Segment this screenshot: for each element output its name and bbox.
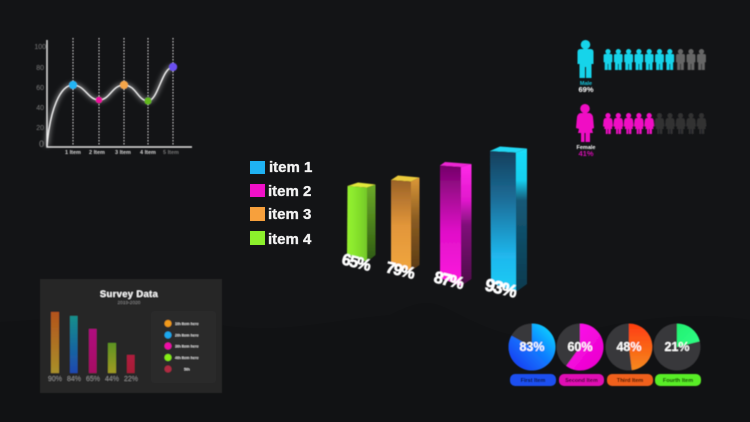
pie: first item 83%: [508, 324, 556, 370]
y axis labels: 40: [36, 105, 44, 112]
survey bar values: 65%: [86, 376, 100, 383]
pie: second item 60%: 60%: [567, 340, 593, 354]
female percent: 41%: [578, 149, 594, 158]
heading: Survey Data: [100, 289, 159, 300]
curve: [47, 67, 173, 146]
dark hills silhouette: [0, 303, 750, 422]
people chart: male: [578, 40, 706, 94]
y axis labels: 20: [36, 125, 44, 132]
icon row: female: [603, 113, 706, 134]
bar: orange 79%: [384, 176, 420, 283]
inner legend panel: 1th Item here: [175, 322, 199, 326]
pill: second item: [559, 374, 604, 386]
bar: magenta 87%: 87%: [432, 268, 466, 293]
bar: cyan 93%: 93%: [483, 274, 520, 302]
inner legend panel: 5th: [184, 368, 190, 372]
pill: fourth item: Fourth Item: [663, 378, 693, 384]
x axis labels: 2 Item: [89, 150, 105, 156]
curve glow: [47, 67, 173, 146]
pie: third item 48%: [606, 324, 652, 370]
male label: Male: [580, 81, 592, 87]
y axis labels: [34, 44, 46, 149]
pie: fourth item 21%: [654, 324, 700, 370]
pill: third item: Third Item: [617, 378, 643, 384]
pie: third item 48%: 48%: [616, 340, 642, 354]
inner legend panel: 4th Item here: [175, 356, 199, 360]
panel: survey data: [40, 279, 222, 393]
y axis labels: 100: [34, 44, 46, 51]
bar: green 65%: [340, 182, 376, 275]
pill: third item: [607, 374, 653, 386]
bar: cyan 93%: [483, 146, 527, 302]
icon: large male: [578, 40, 594, 78]
data points: [69, 63, 177, 105]
survey bar values: 90%: [48, 376, 62, 383]
legend item 3: item 3: [268, 206, 311, 223]
icon row: male: [604, 49, 706, 70]
x axis labels: 3 Item: [115, 150, 131, 156]
dotted guide lines: [73, 38, 173, 146]
legend: [250, 159, 312, 248]
survey bar values: 22%: [124, 376, 138, 383]
survey bars: [51, 312, 134, 373]
y axis labels: 60: [36, 85, 44, 92]
pie: fourth item 21%: 21%: [664, 340, 690, 354]
legend item 1: item 1: [269, 159, 312, 176]
inner legend panel: 3th Item here: [175, 344, 199, 348]
x axis labels: 1 Item: [65, 150, 81, 156]
legend item 4: item 4: [268, 231, 312, 248]
pill: fourth item: [655, 374, 701, 386]
bar: magenta 87%: [432, 162, 472, 293]
people chart: female: [576, 104, 706, 158]
pie: second item 60%: [556, 324, 604, 370]
3D bar chart: [340, 146, 527, 302]
pill: first item: First Item: [521, 378, 545, 384]
bar: green 65%: 65%: [340, 251, 372, 275]
axes: [47, 40, 192, 147]
female label: Female: [577, 145, 595, 151]
x axis labels: 5 Item: [163, 150, 179, 156]
pie charts: [508, 324, 701, 386]
x axis labels: [65, 150, 179, 156]
inner legend panel: [151, 311, 216, 383]
bar: orange 79%: 79%: [384, 259, 416, 283]
y axis labels: 0: [39, 139, 44, 149]
pill: second item: Second Item: [565, 378, 598, 384]
pill: first item: [510, 374, 556, 386]
icon: large female: [576, 104, 594, 142]
male percent: 69%: [578, 85, 594, 94]
legend item 2: item 2: [268, 183, 311, 200]
inner legend panel: 2th Item here: [175, 334, 199, 338]
pie: first item 83%: 83%: [519, 340, 545, 354]
survey bar values: 44%: [105, 376, 119, 383]
survey bar values: [48, 376, 138, 383]
subtitle: 2019-2020: [118, 300, 141, 306]
x axis labels: 4 Item: [140, 150, 156, 156]
survey bar values: 84%: [67, 376, 81, 383]
line chart: [34, 38, 192, 156]
y axis labels: 80: [36, 65, 44, 72]
